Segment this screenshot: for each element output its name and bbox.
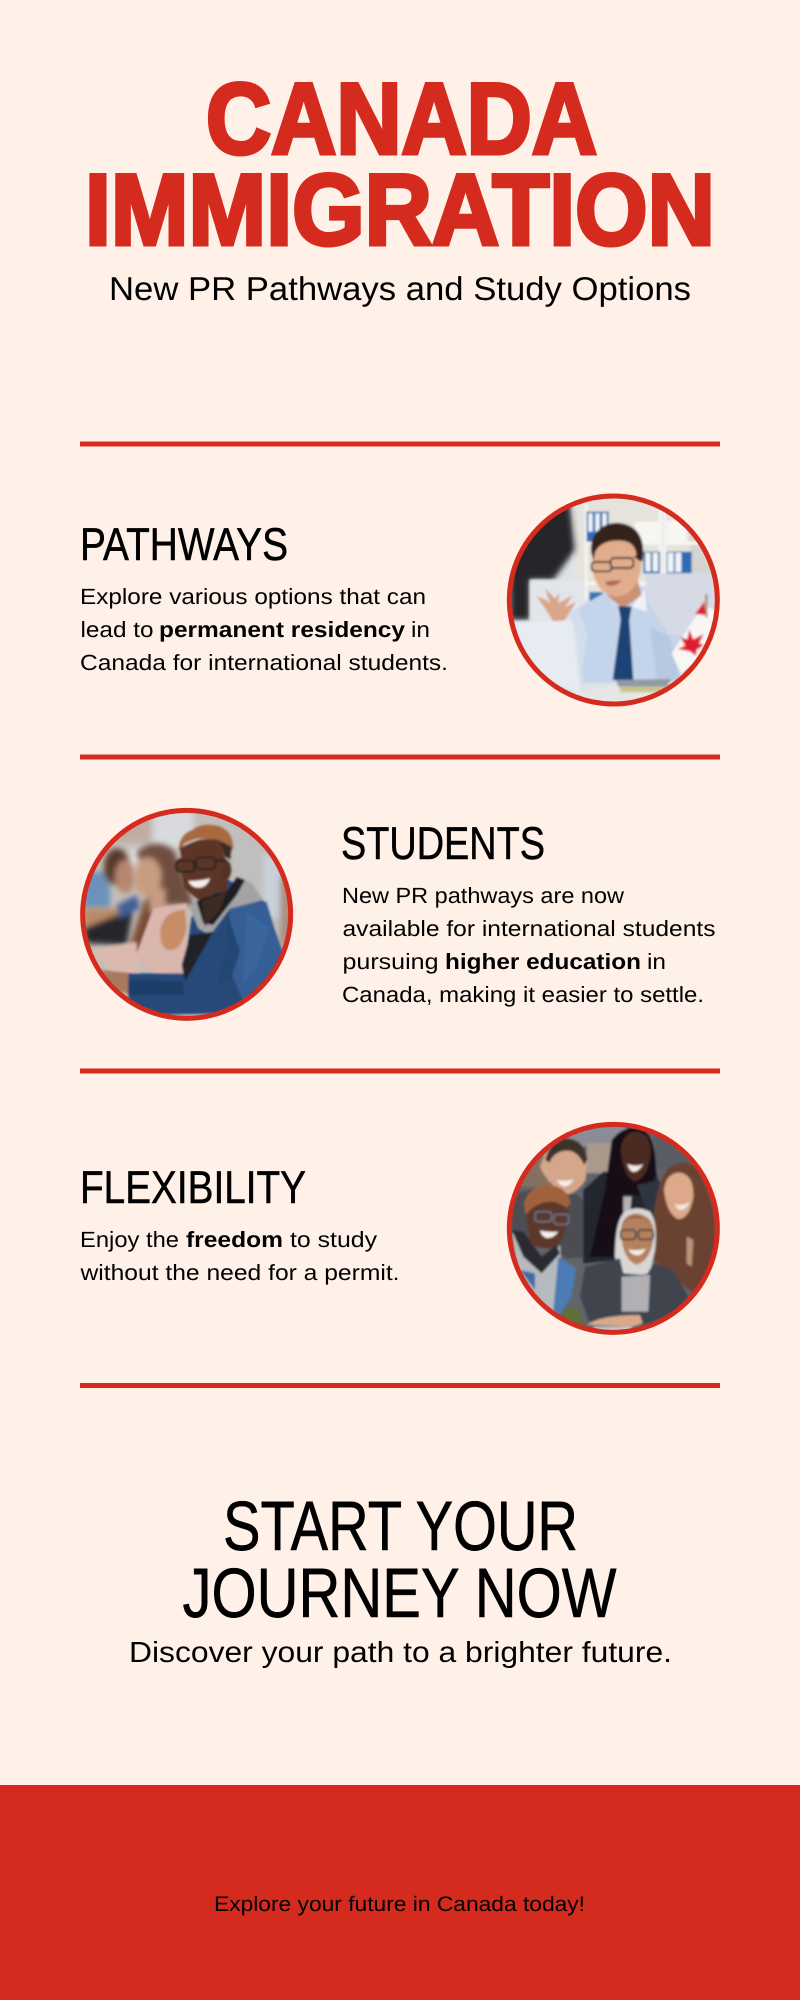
text block: students: New PR pathways are now — [342, 883, 624, 908]
call to action heading — [182, 1487, 616, 1632]
text block: pathways: Explore various options that can — [80, 584, 426, 609]
photo: businessman at desk with Canadian flag — [503, 490, 723, 710]
text block: students: in — [647, 949, 666, 974]
title: CANADA — [206, 64, 597, 176]
text block: flexibility — [79, 1227, 399, 1285]
photo: smiling student in denim jacket — [77, 802, 297, 1022]
text block: flexibility: freedom — [186, 1227, 283, 1252]
title: IMMIGRATION — [85, 154, 715, 266]
text block: pathways: lead to — [80, 617, 154, 642]
text block: students: Canada, making it easier to settle. — [342, 982, 704, 1007]
heading: flexibility: FLEXIBILITY — [80, 1161, 306, 1213]
call to action heading: JOURNEY NOW — [182, 1554, 616, 1632]
heading: students: STUDENTS — [341, 817, 545, 869]
panel: students — [77, 802, 715, 1022]
text block: pathways: in — [411, 617, 430, 642]
call to action subtext: Discover your path to a brighter future. — [129, 1637, 672, 1669]
call to action heading: START YOUR — [223, 1487, 578, 1565]
photo: group of smiling students — [503, 1120, 723, 1340]
title — [85, 64, 715, 266]
panel: flexibility — [79, 1120, 723, 1340]
subtitle: New PR Pathways and Study Options — [109, 270, 691, 307]
text block: pathways — [80, 584, 448, 675]
text block: flexibility: without the need for a permit. — [79, 1260, 399, 1285]
text block: pathways: Canada for international students. — [80, 650, 448, 675]
text block: students: higher education — [445, 949, 641, 974]
text block: pathways: permanent residency — [159, 617, 406, 642]
footer text: Explore your future in Canada today! — [214, 1893, 585, 1916]
footer band — [0, 1785, 800, 2000]
text block: flexibility: to study — [290, 1227, 377, 1252]
heading: pathways: PATHWAYS — [80, 518, 288, 570]
text block: students: pursuing — [342, 949, 438, 974]
panel: pathways — [80, 490, 723, 710]
text block: students: available for international students — [342, 916, 716, 941]
text block: students — [342, 883, 716, 1007]
text block: flexibility: Enjoy the — [80, 1227, 179, 1252]
